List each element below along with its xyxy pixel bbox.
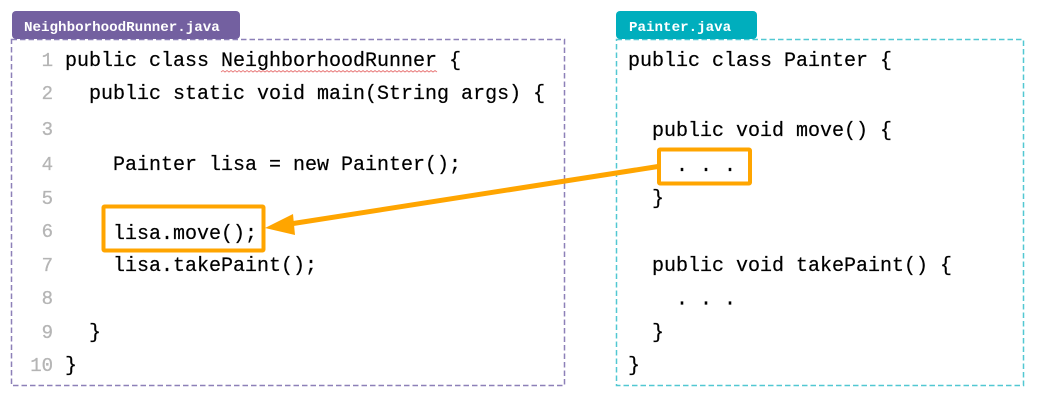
file tab xyxy=(616,11,757,39)
file tab xyxy=(12,11,240,39)
code: NeighborhoodRunner: } xyxy=(65,355,77,378)
arrow: move body to call xyxy=(265,166,658,235)
code: NeighborhoodRunner: public class NeighborhoodRunner { xyxy=(65,50,461,73)
code: Painter xyxy=(628,50,952,378)
code: Painter: } xyxy=(628,355,640,378)
code: NeighborhoodRunner xyxy=(65,50,545,378)
code: Painter: public class Painter { xyxy=(628,50,892,73)
code: Painter: . . . xyxy=(676,155,736,178)
line numbers: 1 xyxy=(42,50,53,72)
line numbers: 3 xyxy=(42,119,53,141)
code: NeighborhoodRunner: lisa.move(); xyxy=(113,223,257,246)
spellcheck squiggle xyxy=(221,70,449,72)
panel border xyxy=(12,40,564,386)
file tab: Painter.java xyxy=(629,20,732,36)
panel: NeighborhoodRunner.java xyxy=(12,11,564,386)
highlight box: move method body xyxy=(659,150,750,184)
code: NeighborhoodRunner: Painter lisa = new Painter(); xyxy=(113,154,461,177)
line numbers: 6 xyxy=(42,221,53,243)
code: Painter: . . . xyxy=(676,288,736,312)
line numbers: 2 xyxy=(42,83,53,105)
highlight box: lisa.move() call xyxy=(104,206,264,250)
panel: Painter.java xyxy=(616,11,1024,386)
code: Painter: } xyxy=(652,188,664,211)
line numbers: 7 xyxy=(42,255,53,277)
line numbers: 8 xyxy=(42,288,53,310)
code: Painter: } xyxy=(652,322,664,345)
code: NeighborhoodRunner: lisa.takePaint(); xyxy=(113,255,317,278)
code: Painter: public void takePaint() { xyxy=(652,255,952,278)
code: NeighborhoodRunner: } xyxy=(89,322,101,345)
code: NeighborhoodRunner: public static void main(String args) { xyxy=(89,83,545,106)
line numbers xyxy=(30,50,53,377)
line numbers: 9 xyxy=(42,322,53,344)
line numbers: 5 xyxy=(42,188,53,210)
file tab: NeighborhoodRunner.java xyxy=(24,20,220,36)
panel border xyxy=(616,40,1024,386)
line numbers: 4 xyxy=(42,154,53,176)
code: Painter: public void move() { xyxy=(652,120,892,143)
line numbers: 10 xyxy=(30,355,53,377)
